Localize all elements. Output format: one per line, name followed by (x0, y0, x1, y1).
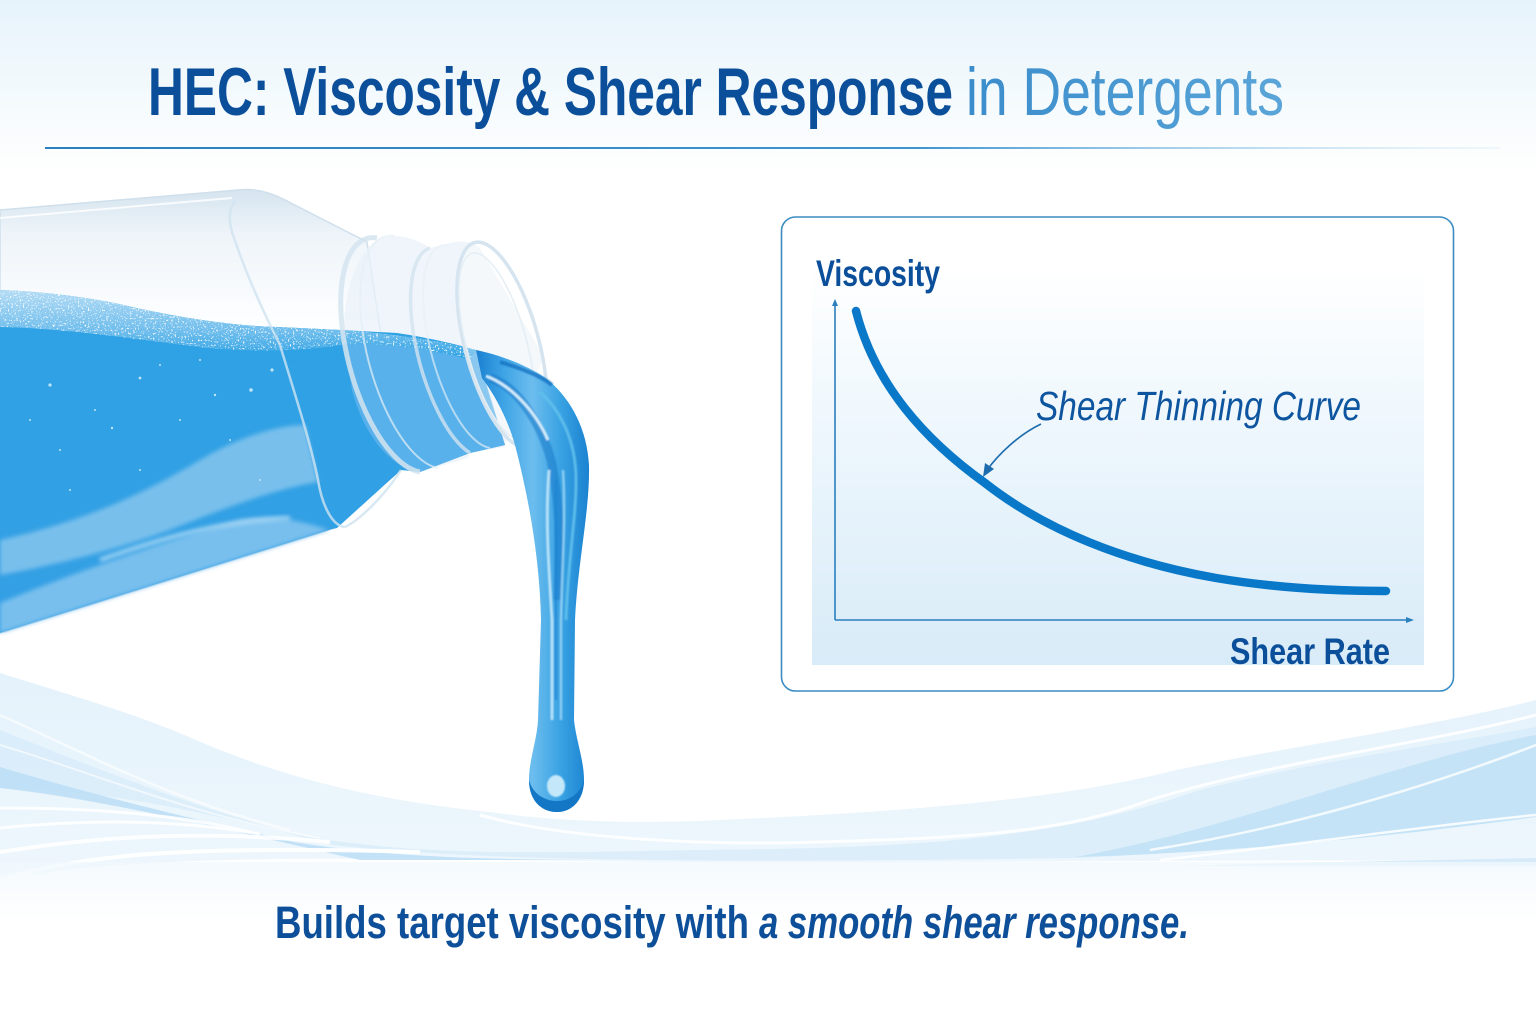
bottle pouring blue detergent (0, 189, 589, 812)
caption: a smooth shear response. (759, 897, 1189, 948)
x axis label: Shear Rate (1230, 631, 1390, 672)
y axis (832, 299, 838, 620)
bottle mouth rim (439, 233, 565, 457)
bubbles (29, 359, 274, 491)
caption: Builds target viscosity with (275, 897, 749, 948)
bottle glass body (0, 189, 401, 633)
chart plot area (812, 268, 1424, 665)
bottle neck rings (341, 236, 490, 472)
curve callout: Shear Thinning Curve (1036, 383, 1361, 429)
liquid highlight band (0, 425, 318, 575)
drop highlight (529, 775, 584, 812)
neck liquid tint (345, 340, 505, 472)
curve callout (983, 383, 1361, 477)
lower edge highlight (0, 518, 329, 633)
y axis label: Viscosity (816, 253, 940, 294)
blue liquid in bottle and neck (0, 290, 505, 633)
caption (275, 897, 1189, 948)
x axis (835, 617, 1414, 623)
shear thinning curve (856, 311, 1386, 591)
pouring stream (476, 350, 589, 812)
bottle shoulder curve (230, 201, 401, 527)
background waves (0, 673, 1536, 922)
panel: viscosity chart (782, 217, 1454, 691)
liquid foam surface (0, 290, 476, 360)
title: in Detergents (966, 54, 1284, 130)
neck glass (344, 236, 544, 472)
title: HEC: Viscosity & Shear Response (148, 54, 953, 130)
